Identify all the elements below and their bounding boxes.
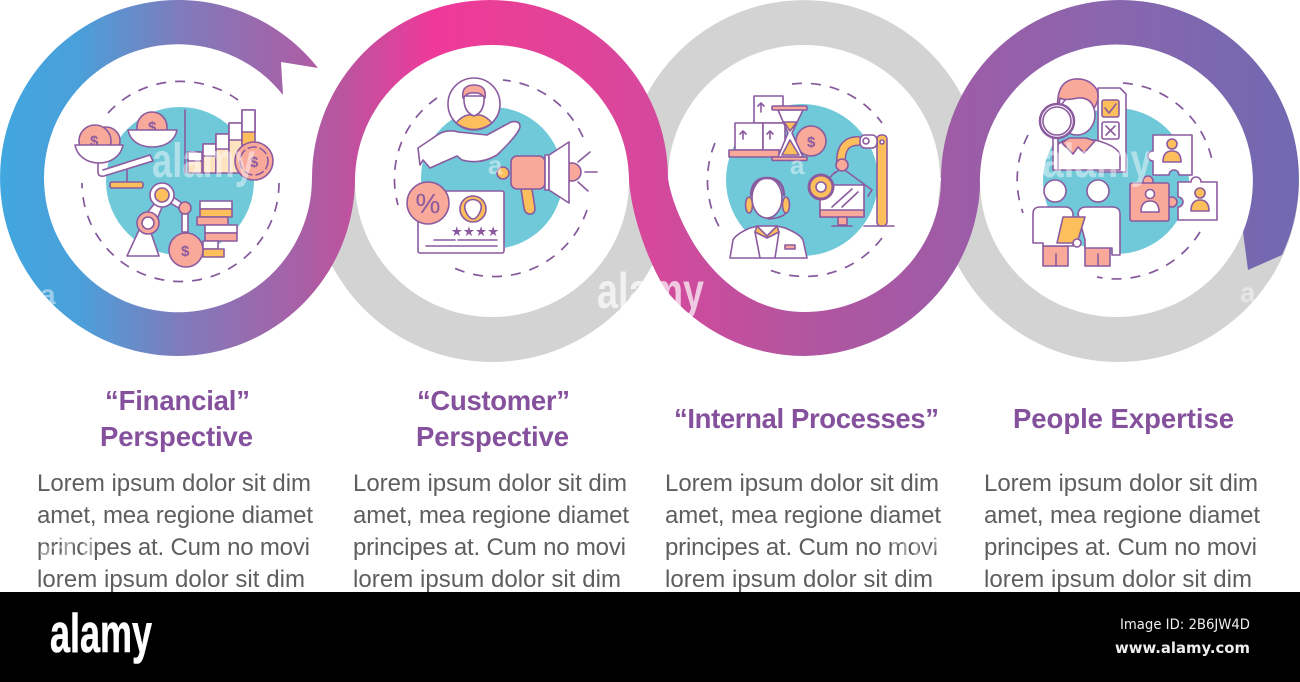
body copy: lorem ipsum dolor sit dim xyxy=(665,566,933,593)
teal backdrop xyxy=(1043,108,1189,254)
icon: two colleagues with clipboard xyxy=(1033,180,1120,266)
white disc: step 4 xyxy=(980,45,1253,317)
body copy: principes at. Cum no movi xyxy=(984,534,1257,561)
body copy: Lorem ipsum dolor sit dim xyxy=(984,470,1258,497)
black footer bar xyxy=(0,592,1300,682)
icon: balance scale with coins xyxy=(75,112,177,188)
icon: balance scale with coins: $ xyxy=(148,119,157,136)
icon: balance scale with coins: $ xyxy=(90,133,99,150)
icon: rising bar chart with coin: $ xyxy=(250,154,259,171)
stock watermarks: alamy xyxy=(597,263,704,319)
heading: “Internal Processes” xyxy=(674,403,939,434)
icon: white puzzle piece top xyxy=(1148,135,1192,175)
teal backdrop xyxy=(726,104,878,256)
body copy: principes at. Cum no movi xyxy=(353,534,626,561)
gradient ribbon with arrow head and tail xyxy=(0,0,1299,356)
white disc: step 2 xyxy=(355,45,629,317)
column 2 text: customer perspective xyxy=(353,385,629,593)
white disc: step 1 xyxy=(44,44,312,312)
stock watermarks: a xyxy=(790,150,805,180)
heading: Perspective xyxy=(100,421,253,452)
body copy: principes at. Cum no movi xyxy=(37,534,310,561)
grey ring: step 3 upper half xyxy=(626,0,982,178)
heading: People Expertise xyxy=(1013,403,1234,434)
footer logo: alamy xyxy=(50,602,152,664)
column 4 text: people expertise xyxy=(984,403,1260,593)
grey ring: step 4 lower half xyxy=(937,181,1299,362)
body copy: amet, mea regione diamet xyxy=(353,502,629,529)
icon group: customer perspective xyxy=(394,78,597,277)
icon: robot arm and coin stacks xyxy=(127,183,237,267)
stock watermarks xyxy=(38,135,1256,567)
icon: rising bar chart with coin xyxy=(185,110,273,180)
icon: support agent with headset xyxy=(730,178,807,258)
grey ring: step 2 lower half xyxy=(311,181,673,362)
icon: hourglass and coin xyxy=(772,106,826,160)
icon group: financial perspective xyxy=(75,81,279,282)
icon: rating card xyxy=(407,182,504,253)
dashed orbit xyxy=(1017,83,1212,279)
icon: megaphone xyxy=(497,142,597,214)
body copy: amet, mea regione diamet xyxy=(984,502,1260,529)
body copy: Lorem ipsum dolor sit dim xyxy=(665,470,939,497)
body copy: Lorem ipsum dolor sit dim xyxy=(37,470,311,497)
body copy: lorem ipsum dolor sit dim xyxy=(37,566,305,593)
icon: open hand xyxy=(418,122,520,168)
icon: peach puzzle piece xyxy=(1130,176,1177,221)
teal backdrop xyxy=(421,107,563,249)
stock watermarks: a xyxy=(488,150,503,180)
icon: hourglass and coin: $ xyxy=(807,134,816,151)
dashed orbit xyxy=(394,80,587,277)
stock watermarks: alamy xyxy=(1042,135,1152,188)
heading: “Customer” xyxy=(417,385,570,416)
stock watermarks: a xyxy=(330,275,346,306)
body copy: lorem ipsum dolor sit dim xyxy=(984,566,1252,593)
heading: Perspective xyxy=(416,421,569,452)
stock watermarks: my xyxy=(890,523,941,567)
icon group: internal processes xyxy=(707,83,894,276)
icon: robot arm and coin stacks: $ xyxy=(181,243,190,260)
icon: analyst with magnifier xyxy=(1040,79,1120,170)
column 3 text: internal processes xyxy=(665,403,941,593)
heading: “Financial” xyxy=(105,385,250,416)
image id: Image ID: 2B6JW4D xyxy=(1120,617,1250,633)
dashed orbit xyxy=(82,81,279,282)
stock watermarks: al xyxy=(38,523,98,567)
percent sign: % xyxy=(416,188,440,219)
dashed orbit xyxy=(707,83,882,276)
stock watermarks: a xyxy=(40,279,56,310)
icon: customer avatar xyxy=(448,78,500,130)
icon: robot arm with gear and monitor xyxy=(809,135,894,226)
icon group: people expertise xyxy=(1017,79,1217,279)
body copy: Lorem ipsum dolor sit dim xyxy=(353,470,627,497)
body copy: amet, mea regione diamet xyxy=(37,502,313,529)
body copy: lorem ipsum dolor sit dim xyxy=(353,566,621,593)
icon: white puzzle piece right xyxy=(1178,177,1217,220)
white disc: step 3 xyxy=(668,45,940,312)
body copy: amet, mea regione diamet xyxy=(665,502,941,529)
teal backdrop xyxy=(106,107,254,255)
column 1 text: financial perspective xyxy=(37,385,313,593)
stock watermarks: a xyxy=(1240,277,1256,308)
body copy: principes at. Cum no movi xyxy=(665,534,938,561)
icon: checklist document xyxy=(1098,88,1126,172)
stock watermarks: alamy xyxy=(152,135,255,188)
rating stars: ★★★★ xyxy=(451,224,499,239)
icon: boxes on shelf xyxy=(729,96,785,157)
site url: www.alamy.com xyxy=(1115,639,1250,657)
